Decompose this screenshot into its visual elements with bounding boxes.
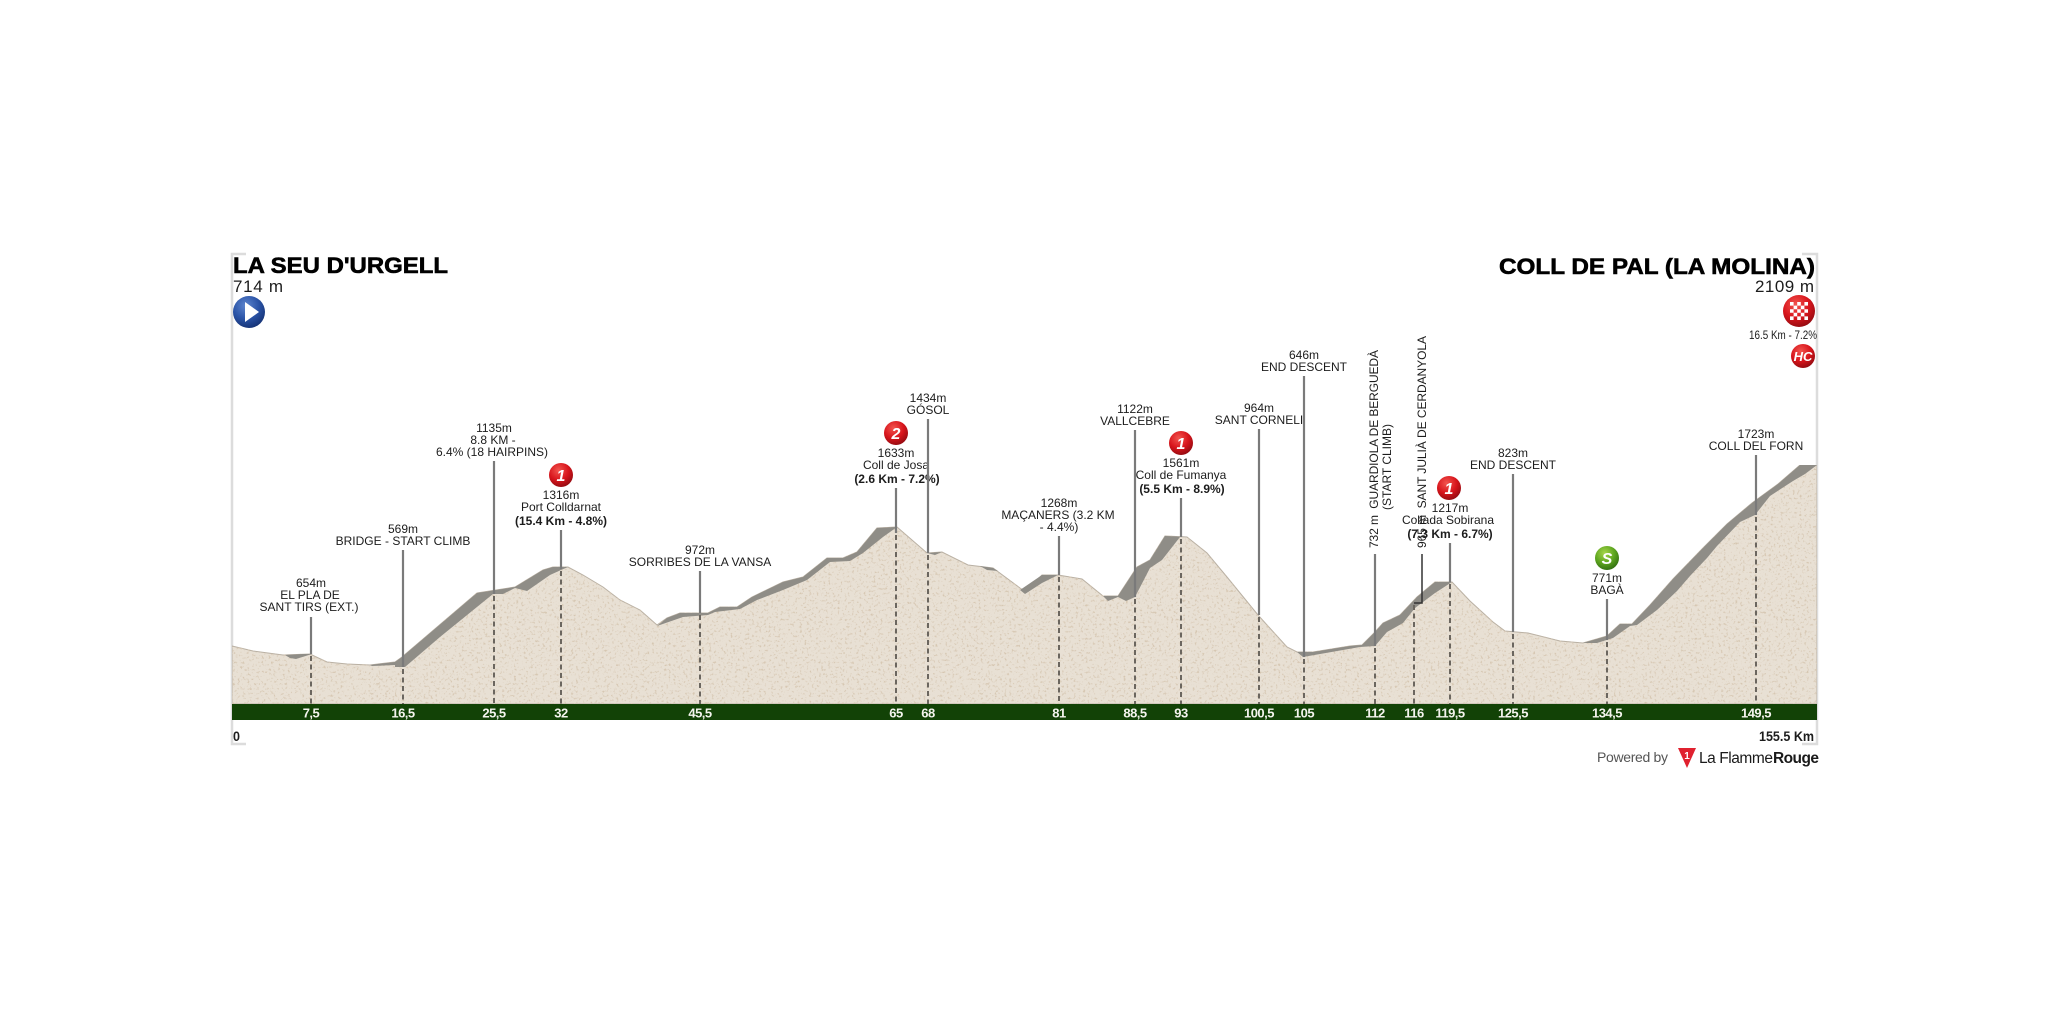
icon: category 1: 1 <box>557 468 566 485</box>
marker: 119,5 km Collada Sobirana: 1217m <box>1432 501 1468 515</box>
marker: 65 km Coll de Josa: 1633m <box>878 446 914 460</box>
marker: 100,5 km <box>1215 401 1303 704</box>
marker: 32 km Port Colldarnat: (15.4 Km - 4.8%) <box>515 514 607 528</box>
kilometre labels: 32 <box>554 706 568 720</box>
icon: category 1: 1 <box>1445 481 1454 498</box>
marker: 81 km: - 4.4%) <box>1040 520 1078 534</box>
start distance: 0 <box>233 728 240 744</box>
kilometre labels <box>303 706 1771 720</box>
icon: finish checker <box>1783 295 1815 327</box>
elevation profile chart <box>232 465 1817 720</box>
marker: 88,5 km: 1122m <box>1117 402 1153 416</box>
marker: 112 km <box>1366 350 1394 704</box>
kilometre labels: 119,5 <box>1435 706 1465 720</box>
marker: 16,5 km <box>336 522 470 704</box>
icon: category 2: 2 <box>891 426 901 443</box>
marker: 88,5 km <box>1100 402 1170 704</box>
start heading: 714 m <box>233 277 283 296</box>
icon: HC category: HC <box>1794 349 1813 364</box>
marker: 93 km Coll de Fumanya: (5.5 Km - 8.9%) <box>1139 482 1225 496</box>
marker: 32 km Port Colldarnat <box>515 463 607 704</box>
finish climb length: 16.5 Km - 7.2% <box>1749 328 1817 342</box>
marker: 81 km <box>1001 496 1115 704</box>
kilometre labels: 65 <box>889 706 903 720</box>
kilometre labels: 134,5 <box>1592 706 1622 720</box>
marker: 100,5 km: SANT CORNELI <box>1215 413 1303 427</box>
marker: 45,5 km: SORRIBES DE LA VANSA <box>629 555 771 569</box>
marker: 116 km <box>1414 336 1429 704</box>
frame corners <box>232 254 1817 744</box>
marker: 68 km: GÓSOL <box>907 402 950 417</box>
marker: 112 km: (START CLIMB) <box>1380 424 1394 510</box>
marker: 119,5 km Collada Sobirana: (7.3 Km - 6.7%) <box>1407 527 1493 541</box>
marker: 65 km Coll de Josa <box>854 421 940 704</box>
marker: 93 km Coll de Fumanya: 1561m <box>1163 456 1199 470</box>
marker: 16,5 km: BRIDGE - START CLIMB <box>336 534 470 548</box>
kilometre labels: 45,5 <box>688 706 712 720</box>
marker: 25,5 km <box>436 421 548 704</box>
logo: La Flamme Rouge: La Flamme <box>1699 750 1773 767</box>
marker: 134,5 km sprint: BAGÀ <box>1590 582 1624 597</box>
marker: 65 km Coll de Josa: Coll de Josa <box>863 458 929 472</box>
finish heading: 2109 m <box>1755 277 1814 296</box>
logo: La Flamme Rouge <box>1678 748 1819 768</box>
marker: 119,5 km Collada Sobirana: Collada Sobirana <box>1402 513 1494 527</box>
terrain area <box>232 465 1817 704</box>
marker: 134,5 km sprint <box>1590 546 1624 704</box>
green kilometre band <box>232 704 1817 720</box>
marker: 32 km Port Colldarnat: 1316m <box>543 488 579 502</box>
kilometre labels: 93 <box>1174 706 1188 720</box>
kilometre labels: 7,5 <box>303 706 320 720</box>
marker: 7,5 km: 654m <box>296 576 326 590</box>
icon: sprint: S <box>1602 551 1613 568</box>
marker: 7,5 km <box>260 576 358 704</box>
kilometre labels: 81 <box>1052 706 1066 720</box>
marker: 149,5 km: COLL DEL FORN <box>1709 439 1803 453</box>
kilometre labels: 25,5 <box>482 706 506 720</box>
start heading <box>233 253 448 296</box>
kilometre labels: 105 <box>1294 706 1314 720</box>
kilometre labels: 88,5 <box>1123 706 1147 720</box>
icon: category 1 <box>1169 431 1193 455</box>
marker: 7,5 km: EL PLA DE <box>280 588 340 602</box>
marker: 32 km Port Colldarnat: Port Colldarnat <box>521 500 602 514</box>
marker: 93 km Coll de Fumanya <box>1136 431 1227 704</box>
marker: 93 km Coll de Fumanya: Coll de Fumanya <box>1136 468 1227 482</box>
marker: 68 km <box>907 391 950 704</box>
marker: 81 km: MAÇANERS (3.2 KM <box>1001 508 1115 522</box>
icon: category 1 <box>549 463 573 487</box>
icon: HC category <box>1791 344 1815 368</box>
icon: sprint <box>1595 546 1619 570</box>
marker: 16,5 km: 569m <box>388 522 418 536</box>
powered by credit: Powered by <box>1597 749 1668 765</box>
marker: 7,5 km: SANT TIRS (EXT.) <box>260 600 358 614</box>
kilometre labels: 112 <box>1365 706 1385 720</box>
marker: 105 km: 646m <box>1289 348 1319 362</box>
marker: 125,5 km: 823m <box>1498 446 1528 460</box>
start heading: LA SEU D'URGELL <box>233 253 448 278</box>
kilometre labels: 68 <box>921 706 935 720</box>
icon: category 2 <box>884 421 908 445</box>
marker: 119,5 km Collada Sobirana <box>1402 476 1494 704</box>
marker: 45,5 km <box>629 543 771 704</box>
finish heading <box>1499 254 1815 296</box>
kilometre labels: 116 <box>1404 706 1424 720</box>
marker: 68 km: 1434m <box>910 391 946 405</box>
marker: 65 km Coll de Josa: (2.6 Km - 7.2%) <box>854 472 940 486</box>
marker: 116 km: 965 m SANT JULIÀ DE CERDANYOLA <box>1414 336 1429 548</box>
icon: category 1 <box>1437 476 1461 500</box>
marker: 100,5 km: 964m <box>1244 401 1274 415</box>
marker: 88,5 km: VALLCEBRE <box>1100 414 1170 428</box>
marker: 134,5 km sprint: 771m <box>1592 571 1622 585</box>
marker: 25,5 km: 1135m <box>476 421 512 435</box>
marker: 105 km: END DESCENT <box>1261 360 1348 374</box>
marker: 125,5 km: END DESCENT <box>1470 458 1557 472</box>
marker: 25,5 km: 6.4% (18 HAIRPINS) <box>436 445 548 459</box>
marker: 81 km: 1268m <box>1041 496 1077 510</box>
kilometre labels: 100,5 <box>1244 706 1274 720</box>
icon: category 1: 1 <box>1177 436 1186 453</box>
marker: 45,5 km: 972m <box>685 543 715 557</box>
kilometre labels: 125,5 <box>1498 706 1528 720</box>
kilometre labels: 16,5 <box>391 706 415 720</box>
marker: 149,5 km <box>1709 427 1803 704</box>
marker: 105 km <box>1261 348 1348 704</box>
finish distance: 155.5 Km <box>1759 728 1814 744</box>
logo: La Flamme Rouge: 1 <box>1684 751 1690 762</box>
climb shading <box>285 465 1817 667</box>
logo: La Flamme Rouge: Rouge <box>1773 750 1819 767</box>
icon: start play <box>233 296 265 328</box>
marker: 149,5 km: 1723m <box>1738 427 1774 441</box>
marker: 25,5 km: 8.8 KM - <box>470 433 516 447</box>
kilometre labels: 149,5 <box>1741 706 1771 720</box>
marker: 112 km: 732 m GUARDIOLA DE BERGUEDÀ <box>1366 350 1381 548</box>
finish heading: COLL DE PAL (LA MOLINA) <box>1499 254 1815 279</box>
marker: 125,5 km <box>1470 446 1557 704</box>
